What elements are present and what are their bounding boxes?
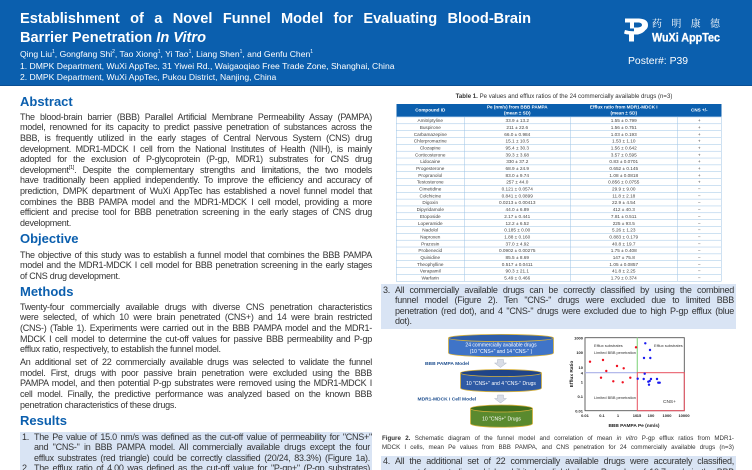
abstract text xyxy=(20,112,372,228)
table 1: 1.79 ± 0.374 xyxy=(611,275,637,280)
scatter chart: efflux ratio vs Pe xyxy=(569,336,690,429)
blue points xyxy=(636,342,661,386)
table 1: 40.8 ± 19.7 xyxy=(612,241,635,246)
table 1: 225 ± 93.5 xyxy=(613,220,635,226)
funnel stage 1 xyxy=(448,334,554,357)
table 1: 90.3 ± 21.1 xyxy=(506,268,529,273)
result item 3: penetration (red dot), and 4 "CNS-" drugs were excluded due to high P-gp efflux (blue xyxy=(395,306,734,316)
methods text xyxy=(20,302,372,410)
x axis ticks: 0.01 xyxy=(581,413,590,418)
table 1: 39.3 ± 3.68 xyxy=(506,152,529,157)
methods text: An additional set of 22 commercially available drugs was selected to validate the funnel xyxy=(20,357,372,367)
table 1: 1.55 ± 0.799 xyxy=(611,117,637,123)
table 1: 1.53 ± 1.10 xyxy=(612,138,635,143)
result item 3: 3. xyxy=(383,284,390,294)
table 1: 211 ± 22.6 xyxy=(506,124,528,130)
table 1: 257 ± 44.0 xyxy=(506,179,528,184)
x axis ticks: 100 xyxy=(648,413,655,418)
results list xyxy=(20,432,372,470)
chart annotations xyxy=(594,343,683,405)
chart annotations: CNS+ xyxy=(663,399,676,405)
y axis ticks xyxy=(574,336,584,414)
heading: results: Results xyxy=(20,413,67,428)
table 1: Lidocaine xyxy=(420,159,440,164)
x axis ticks: 15 xyxy=(637,413,642,418)
chart annotations: Limited BBB penetration xyxy=(594,350,636,355)
abstract text: prediction, DMPK department of WuXi AppTec has established a novel funnel model that xyxy=(20,186,372,196)
table 1: 83.0 ± 9.74 xyxy=(506,172,529,178)
table 1: − xyxy=(698,220,701,226)
abstract text: BBB, is frequently utilized in the early stages of Central Nervous System (CNS) drug xyxy=(20,133,372,143)
table 1: (mean ± SD) xyxy=(610,110,637,115)
result item 4: All the additional set of 22 commercially available drugs were accurately classified, xyxy=(395,456,734,466)
table 1: − xyxy=(698,248,701,253)
table 1: 1.03 ± 0.193 xyxy=(611,131,637,137)
table 1: − xyxy=(698,268,701,273)
table 1: Progesterone xyxy=(416,165,444,171)
table 1: − xyxy=(698,206,701,212)
funnel stage 1: (10 "CNS+" and 14 "CNS-" ) xyxy=(470,349,533,355)
table 1: 412 ± 40.3 xyxy=(613,206,635,212)
table 1: 5.26 ± 1.23 xyxy=(612,227,635,232)
x axis ticks: 10000 xyxy=(678,413,690,418)
chart annotations: Efflux substrates xyxy=(594,343,623,348)
figure 2 caption xyxy=(382,435,734,451)
table 1: + xyxy=(698,131,701,137)
table 1: 147 ± 75.8 xyxy=(613,254,635,260)
table 1: 7.81 ± 0.511 xyxy=(611,213,637,219)
y axis ticks: 10 xyxy=(579,365,584,370)
abstract text: efficient and precise tool for BBB penetration screening in the early stages of CNS drug xyxy=(20,207,372,217)
y axis ticks: 1 xyxy=(581,380,584,384)
methods text: PAMPA model, and then potential P-gp substrates were removed using the MDR1-MDCK I xyxy=(20,378,372,388)
table 1: 0.185 ± 0.00 xyxy=(504,227,530,232)
objective text xyxy=(20,250,372,281)
table 1: 3.57 ± 0.595 xyxy=(611,152,637,157)
arrow: stage 1 to 2 xyxy=(494,360,506,368)
result item 3 xyxy=(381,284,736,329)
methods text: were selected, of which 10 were brain penetrated (CNS+) and 14 were brain restricted xyxy=(20,312,372,322)
table 1: − xyxy=(698,241,701,246)
table 1: 0.856 ± 0.0755 xyxy=(608,179,639,184)
abstract text: The blood-brain barrier (BBB) Parallel Artificial Membrane Permeability Assay (PAMPA) xyxy=(20,112,372,122)
heading: objective: Objective xyxy=(20,231,79,246)
funnel stage 3 xyxy=(470,405,532,427)
funnel stage 1: 24 commercially available drugs xyxy=(465,342,537,348)
table 1: Testosterone xyxy=(417,179,444,184)
table 1: 37.0 ± 4.92 xyxy=(506,241,529,246)
methods text: MDCK I cell model to determine the cut-off values for passive BBB permeability and P-gp xyxy=(20,334,372,344)
result item 3: All commercially available drugs can be correctly classified by using the combined xyxy=(395,284,734,294)
table 1: + xyxy=(698,138,701,143)
table 1: Amitriptyline xyxy=(417,117,443,123)
table 1: 12.2 ± 6.52 xyxy=(506,220,529,226)
table 1: 0.0213 ± 0.00413 xyxy=(499,200,535,205)
chart annotations: Limited BBB penetration xyxy=(594,395,636,400)
table 1: Colchicine xyxy=(419,193,441,198)
table 1: Etoposide xyxy=(420,213,441,219)
arrow: stage 2 to 3 xyxy=(494,395,506,403)
chart annotations: Efflux substrates xyxy=(654,343,683,348)
table 1: CNS +/- xyxy=(691,107,707,112)
y axis title: Efflux Ratio xyxy=(569,361,575,387)
figure 2 caption: Figure 2. Schematic diagram of the funnel model and correlation of mean in vitro P-gp efflux ratios from MDR1- xyxy=(382,435,734,442)
table 1: 22.9 ± 4.54 xyxy=(612,200,635,205)
table 1: 1.88 ± 0.160 xyxy=(504,234,530,239)
result item 3: dot). xyxy=(395,316,412,326)
table 1: Dipyridamole xyxy=(417,206,444,212)
title: Establishment of a Novel Funnel Model for Evaluating Blood-Brain xyxy=(20,11,531,27)
objective text: of CNS drug development. xyxy=(20,271,120,281)
results list: efflux substrates (red triangle) could be correctly classified (20/24, 83.3%) (Figure 1a). xyxy=(34,453,370,463)
table 1: Clozapine xyxy=(420,145,441,150)
results list: The Pe value of 15.0 nm/s was defined as the cut-off value of permeability for "CNS+" xyxy=(34,432,372,442)
table 1: + xyxy=(698,179,701,184)
table 1: Loperamide xyxy=(418,220,443,226)
table 1: Propranolol xyxy=(418,172,442,178)
methods text: efflux ratio, respectively, to establish the funnel model. xyxy=(20,344,221,354)
table 1: 0.121 ± 0.0574 xyxy=(502,186,533,191)
label: BBB PAMPA model: BBB PAMPA Model xyxy=(425,361,470,367)
result item 4: 4. xyxy=(383,456,390,466)
abstract text: model, renowned for its capacity to predict passive penetration of substances across the xyxy=(20,122,372,132)
table 1: 85.5 ± 8.69 xyxy=(506,254,529,260)
affiliations xyxy=(20,60,395,82)
table 1: Probenecid xyxy=(418,248,442,253)
table 1: Pe (nm/s) from BBB PAMPA xyxy=(487,105,548,110)
table 1: 0.652 ± 0.145 xyxy=(609,165,638,171)
heading: methods: Methods xyxy=(20,284,73,299)
y axis ticks: 100 xyxy=(576,350,584,355)
table 1: Naproxen xyxy=(420,234,440,239)
table 1: − xyxy=(698,254,701,260)
funnel stage 3: 10 "CNS+" Drugs xyxy=(482,416,521,422)
table 1: − xyxy=(698,234,701,239)
table 1: 29.9 ± 9.00 xyxy=(612,186,635,191)
affiliations: 2. DMPK Department, WuXi AppTec, Pukou District, Nanjing, China xyxy=(20,72,276,82)
table 1: Corticosterone xyxy=(415,152,445,157)
table 1: 330 ± 37.2 xyxy=(506,159,528,164)
x axis ticks: 0.1 xyxy=(599,413,606,418)
table 1: + xyxy=(698,117,701,123)
table 1: − xyxy=(698,261,701,267)
table 1: + xyxy=(698,172,701,178)
table 1: 11.8 ± 2.18 xyxy=(612,193,635,198)
x axis title: BBB PAMPA Pe (nm/s) xyxy=(608,423,660,429)
table 1: − xyxy=(698,186,701,191)
table 1: − xyxy=(698,213,701,219)
table 1: 0.841 ± 0.0899 xyxy=(502,193,533,198)
funnel diagram xyxy=(418,334,554,428)
table 1: Carbamazepine xyxy=(414,131,447,137)
objective text: The objective of this study was to establish a funnel model that combines the BBB PAMPA xyxy=(20,250,372,260)
authors: Qing Liu1, Gongfang Shi2, Tao Xiong1, Yi Tao1, Liang Shen1, and Genfu Chen1 xyxy=(20,49,313,59)
table 1: − xyxy=(698,200,701,205)
y axis ticks: 1000 xyxy=(574,336,584,340)
table 1: (mean ± SD) xyxy=(504,110,531,115)
table 1: 0.83 ± 0.0701 xyxy=(609,159,638,164)
table 1: Verapamil xyxy=(420,268,441,273)
abstract text: combines the BBB PAMPA model and the MDR1-MDCK I cell model, providing a more xyxy=(20,197,372,207)
title: Barrier Penetration In Vitro xyxy=(20,30,206,46)
table 1 xyxy=(396,104,722,282)
funnel stage 2: 10 "CNS+" and 4 "CNS-" Drugs xyxy=(466,381,536,387)
table 1: Theophylline xyxy=(417,261,444,267)
red points xyxy=(589,346,637,383)
x axis ticks xyxy=(581,413,690,418)
y axis ticks: 4 xyxy=(581,370,584,376)
table 1: + xyxy=(698,145,701,150)
table 1: 0.883 ± 0.179 xyxy=(609,234,638,239)
table 1: 68.9 ± 24.9 xyxy=(506,165,529,171)
results list: and "CNS-" in BBB PAMPA model. All commercially available drugs except the four xyxy=(34,442,370,452)
y axis ticks: 0.1 xyxy=(577,394,584,399)
abstract text: have traditionally been applied independently. To improve the efficiency and accuracy of xyxy=(20,175,372,185)
table 1: + xyxy=(698,124,701,130)
table 1: + xyxy=(698,165,701,171)
methods text: cell model. Finally, the predictive performance was analyzed based on the known BBB xyxy=(20,389,372,399)
methods text: model. First, drugs with poor passive brain penetration were excluded using the BBB xyxy=(20,368,372,378)
table 1: 2.17 ± 0.441 xyxy=(504,213,530,219)
table 1: 0.0902 ± 0.00275 xyxy=(499,248,535,253)
methods text: (CNS-) (Table 1). Experiments were carried out in the BBB PAMPA model and the MDR1- xyxy=(20,323,372,333)
table 1: − xyxy=(698,227,701,232)
table 1: 1.05 ± 0.0857 xyxy=(609,261,638,267)
table 1: Quinidine xyxy=(420,254,440,260)
table 1: 44.0 ± 6.89 xyxy=(506,206,529,212)
table 1: 1.56 ± 0.751 xyxy=(611,124,637,130)
abstract text: development[1]. Despite the complementary strengths and limitations, the two models xyxy=(20,165,372,175)
table 1: Prazosin xyxy=(421,241,439,246)
table 1: Warfarin xyxy=(421,275,439,280)
x axis ticks: 10 xyxy=(633,413,638,418)
table 1: + xyxy=(698,159,701,164)
funnel stage 2 xyxy=(460,370,542,392)
table 1: 1.56 ± 0.642 xyxy=(611,145,637,150)
label: MDR1-MDCK I cell model: MDR1-MDCK I Cell Model xyxy=(418,396,477,402)
table 1: 15.1 ± 10.5 xyxy=(506,138,529,143)
abstract text: adopted for the exclusion of P-glycoprotein (P-gp, MDR1) substrates for CNS drug xyxy=(20,154,372,164)
poster number: Poster#: P39 xyxy=(628,56,688,67)
logo: WuXi AppTec xyxy=(624,15,721,44)
table 1: 95.4 ± 30.3 xyxy=(506,145,529,150)
table 1: 1.75 ± 0.408 xyxy=(611,248,637,253)
table 1: Nadolol xyxy=(422,227,438,232)
table 1: Cimetidine xyxy=(419,186,441,191)
title xyxy=(20,11,531,46)
methods text: Twenty-four commercially available drugs with diverse CNS penetration characteristics xyxy=(20,302,372,312)
table 1: Buspirone xyxy=(420,124,441,130)
methods text: penetration characteristics of these drugs. xyxy=(20,400,176,410)
table 1: 1.08 ± 0.0818 xyxy=(609,172,638,178)
table 1: 66.0 ± 0.984 xyxy=(504,131,530,137)
result item 4 xyxy=(381,456,736,470)
table 1: Efflux ratio from MDR1-MDCK I xyxy=(590,105,658,110)
table 1: − xyxy=(698,275,701,280)
abstract text: development. xyxy=(20,218,71,228)
y axis ticks: 0.01 xyxy=(575,408,584,414)
results list: 1. xyxy=(22,432,29,442)
table 1: 41.8 ± 2.25 xyxy=(612,268,635,273)
heading: abstract: Abstract xyxy=(20,94,73,109)
table 1: − xyxy=(698,193,701,198)
x axis ticks: 1 xyxy=(617,413,620,418)
table 1: + xyxy=(698,152,701,157)
objective text: model and the MDR1-MDCK I cell model for BBB penetration screening in the early stages xyxy=(20,260,372,270)
table 1: 33.9 ± 13.2 xyxy=(506,117,529,123)
table 1: 0.517 ± 0.0411 xyxy=(502,261,533,267)
header banner xyxy=(0,0,752,86)
result item 3: funnel model (Figure 2). Ten "CNS-" drugs were excluded due to limited BBB xyxy=(395,295,734,305)
table 1: Compound ID xyxy=(415,107,445,112)
table 1: Digoxin xyxy=(422,200,438,205)
affiliations: 1. DMPK Department, WuXi AppTec, 31 Yiwei Rd., Waigaoqiao Free Trade Zone, Shanghai, China xyxy=(20,60,395,70)
abstract text: development. MDR1-MDCK I cell from the National Institutes of Health (NIH), is mainly xyxy=(20,144,372,154)
table 1: 5.49 ± 0.466 xyxy=(504,275,530,280)
table 1: Chlorpromazine xyxy=(414,138,447,143)
logo: WuXi AppTec: 药 明 康 德 xyxy=(652,15,721,30)
table caption: Table 1. Pe values and efflux ratios of the 24 commercially available drugs (n=3) xyxy=(456,93,672,100)
x axis ticks: 1000 xyxy=(663,413,672,418)
figure 2 caption: MDCK I cells, mean Pe values from BBB PAMPA, and CNS penetration for 24 commercially available drugs (n=3) xyxy=(382,444,734,451)
